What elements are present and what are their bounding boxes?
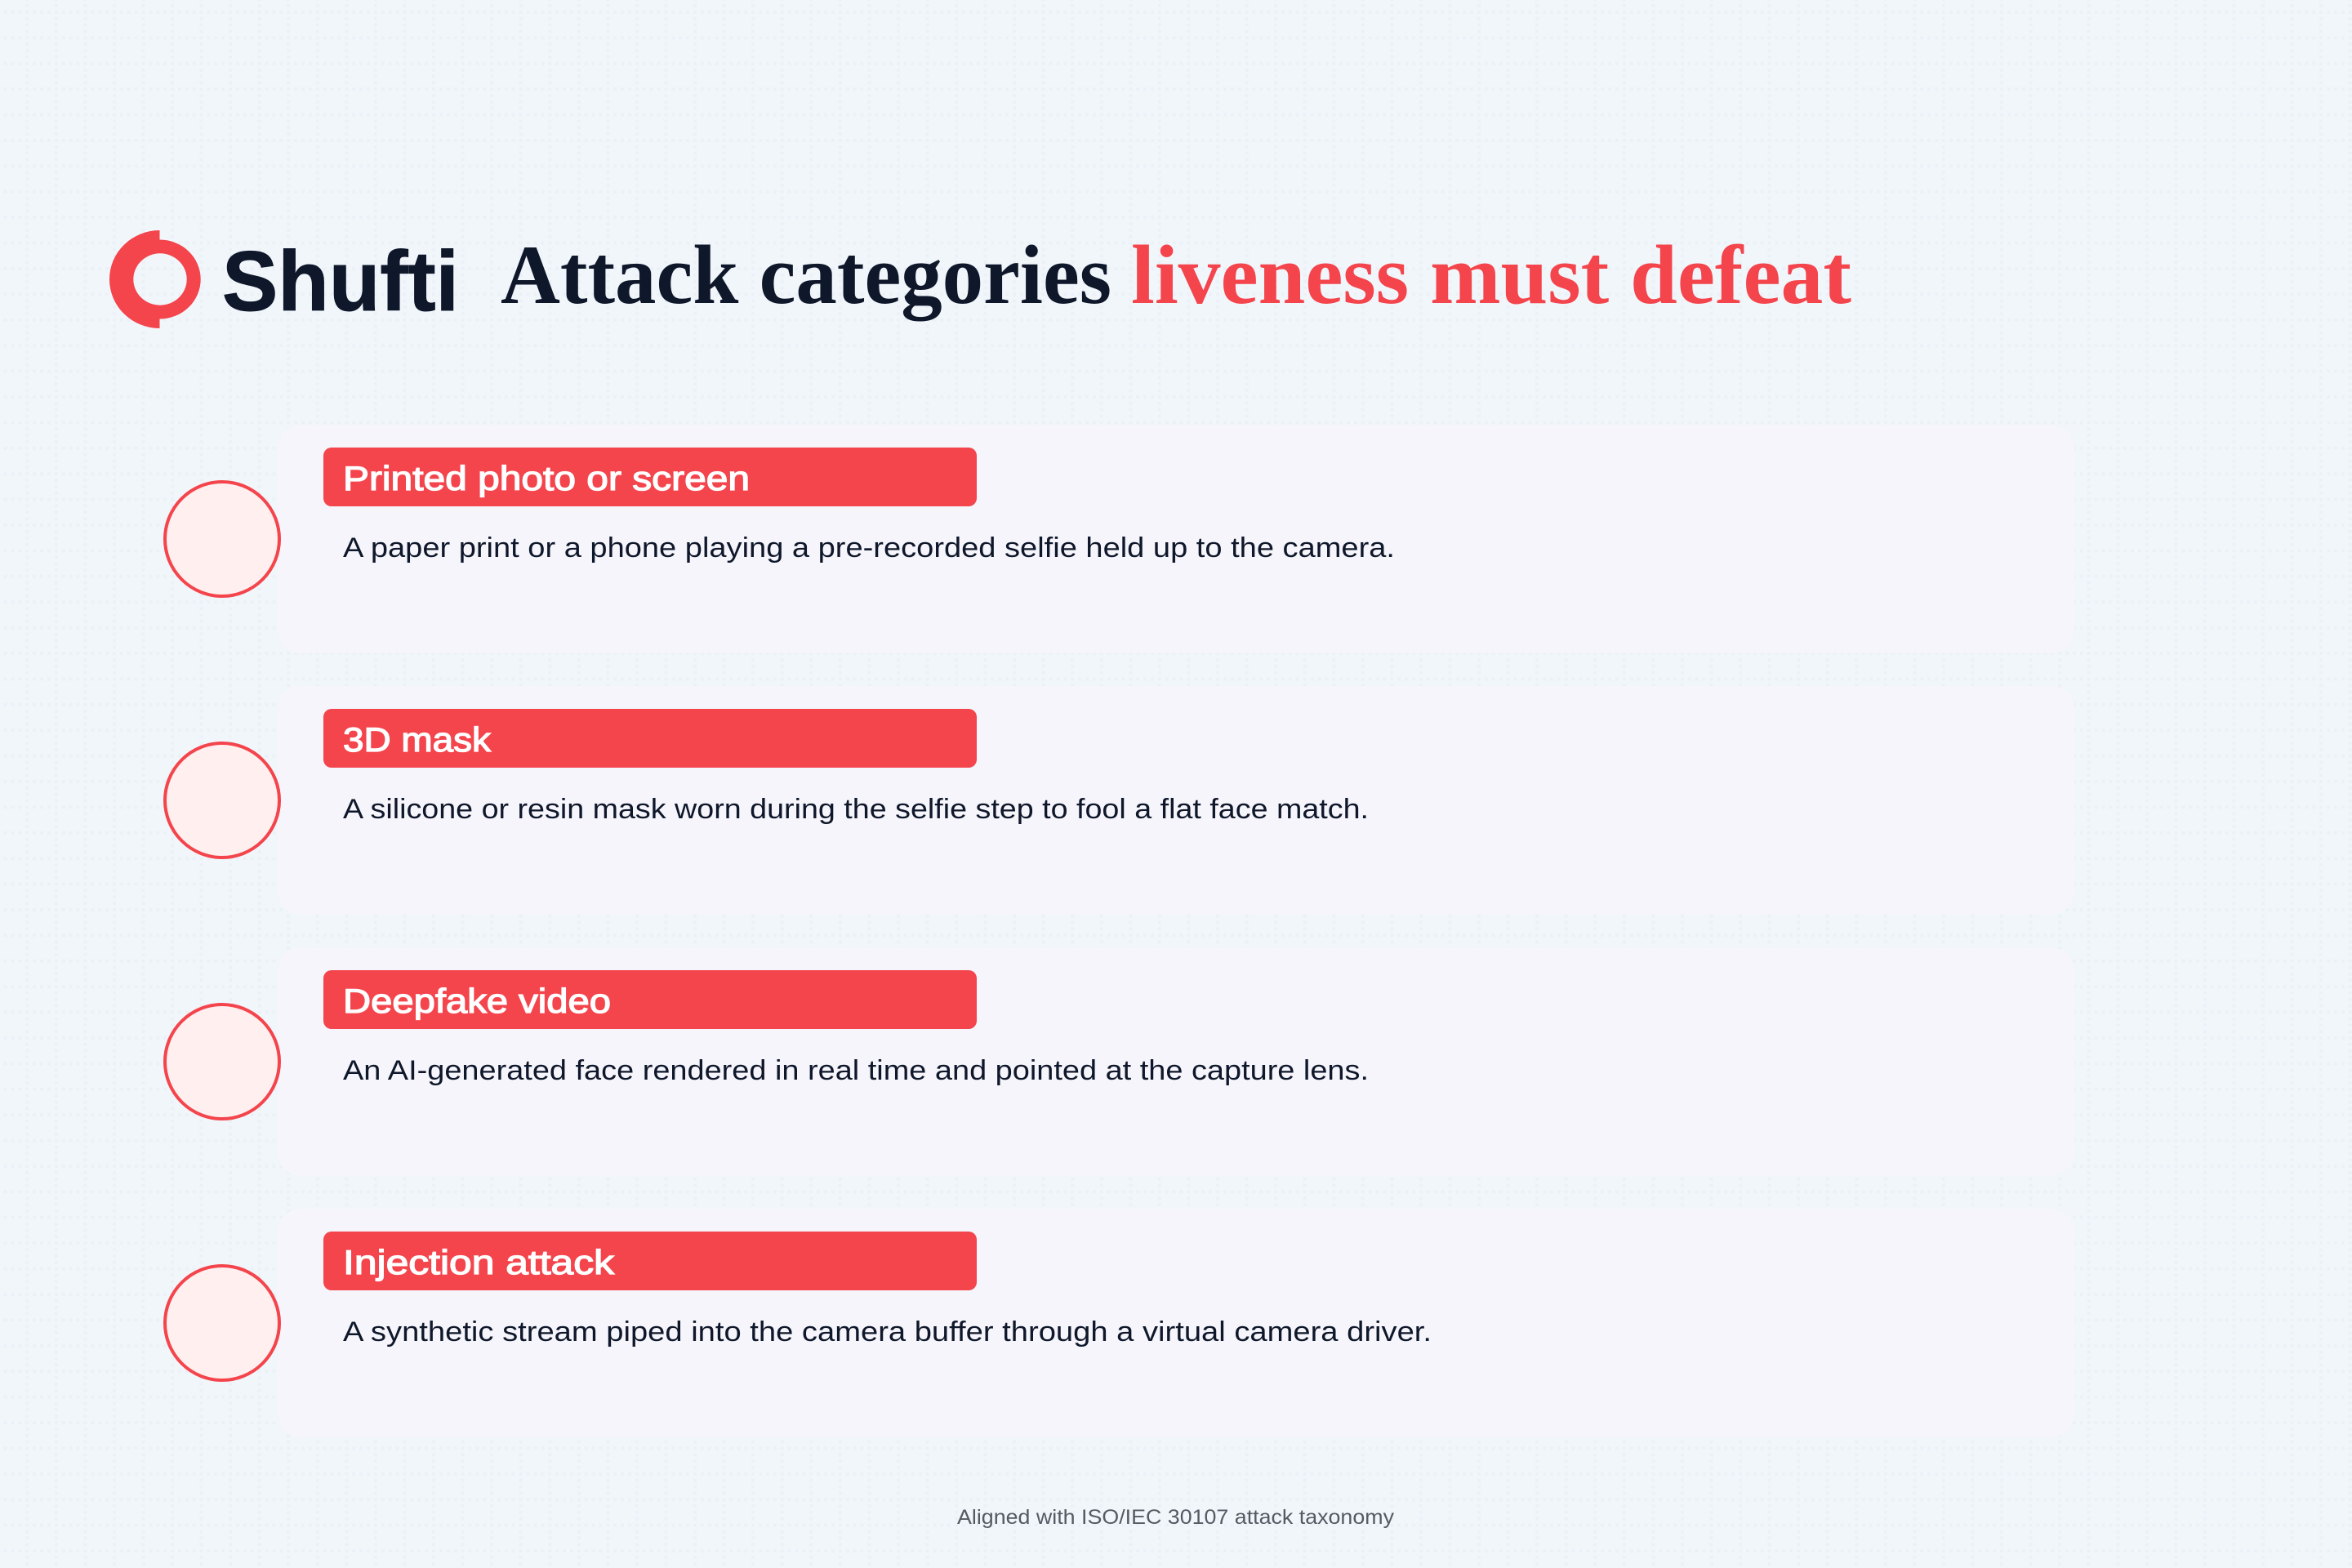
footer note: Aligned with ISO/IEC 30107 attack taxonomy bbox=[957, 1506, 1395, 1529]
heading bar: Injection attack bbox=[343, 1243, 615, 1281]
description: A paper print or a phone playing a pre-recorded selfie held up to the camera. bbox=[343, 532, 1395, 564]
title bbox=[501, 229, 1851, 322]
heading bar: Printed photo or screen bbox=[343, 459, 750, 497]
icon: empty circle bbox=[165, 1004, 279, 1119]
logo: Shufti bbox=[109, 230, 459, 329]
heading bar bbox=[323, 1232, 977, 1290]
heading bar: Deepfake video bbox=[343, 982, 611, 1020]
panel: deepfake video bbox=[165, 947, 2074, 1176]
card background bbox=[278, 425, 2074, 653]
logo wordmark: Shufti bbox=[222, 234, 459, 329]
icon: empty circle bbox=[165, 482, 279, 596]
card background bbox=[278, 686, 2074, 915]
panel: printed photo or screen bbox=[165, 425, 2074, 653]
card background bbox=[278, 1209, 2074, 1437]
icon: empty circle bbox=[165, 743, 279, 858]
panel: 3D mask bbox=[165, 686, 2074, 915]
title: Attack categories bbox=[501, 229, 1111, 322]
panel: injection attack bbox=[165, 1209, 2074, 1437]
description: An AI-generated face rendered in real time and pointed at the capture lens. bbox=[343, 1055, 1369, 1086]
card background bbox=[278, 947, 2074, 1176]
heading bar bbox=[323, 448, 977, 506]
heading bar: 3D mask bbox=[343, 720, 492, 759]
heading bar bbox=[323, 709, 977, 768]
icon: logo ring bbox=[109, 230, 201, 328]
title: liveness must defeat bbox=[1131, 229, 1851, 322]
heading bar bbox=[323, 970, 977, 1029]
icon: empty circle bbox=[165, 1266, 279, 1380]
description: A silicone or resin mask worn during the selfie step to fool a flat face match. bbox=[343, 794, 1369, 825]
description: A synthetic stream piped into the camera buffer through a virtual camera driver. bbox=[343, 1316, 1432, 1348]
